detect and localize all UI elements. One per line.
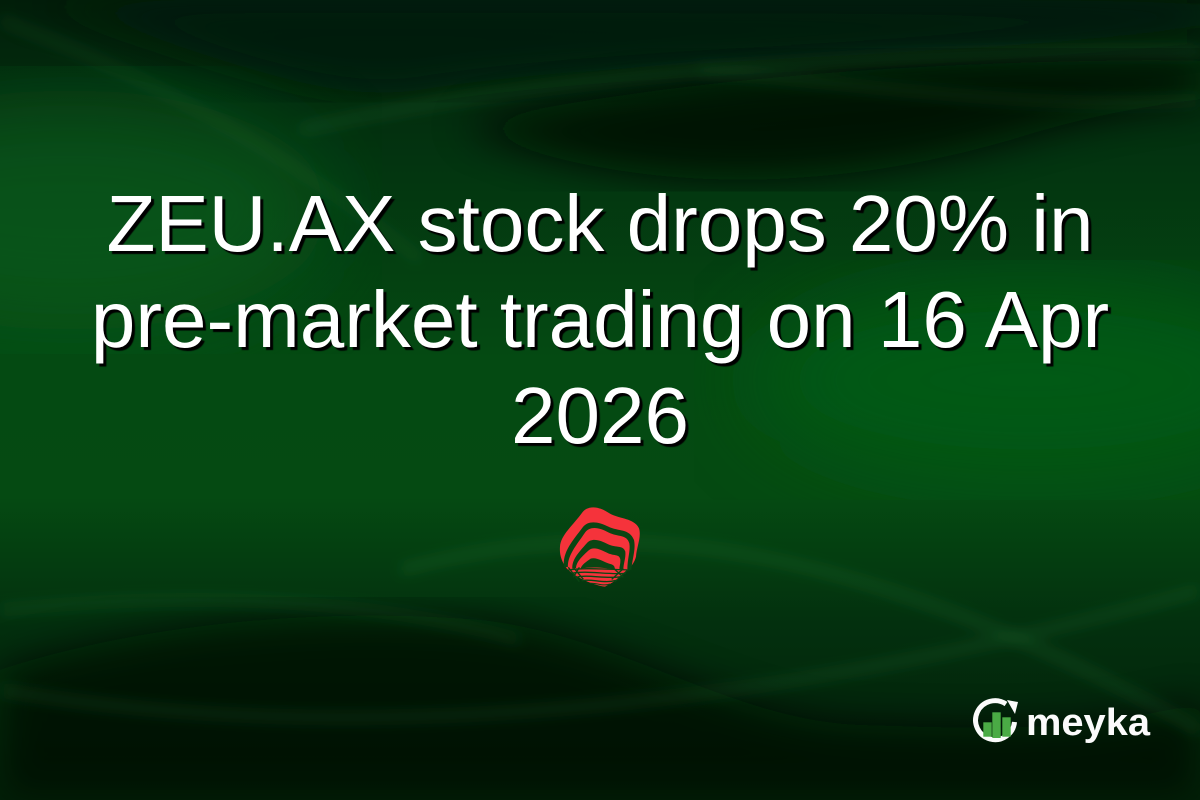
icon: circular arrow with bars [976,700,1018,740]
brand logo: meyka [972,698,1151,744]
title: pre-market trading on 16 Apr [91,275,1109,364]
icon: red layered wave logo [560,507,640,587]
wordmark: meyka [1026,702,1151,744]
title [91,179,1112,460]
title: 2026 [511,371,689,460]
title: ZEU.AX stock drops 20% in [106,179,1094,268]
